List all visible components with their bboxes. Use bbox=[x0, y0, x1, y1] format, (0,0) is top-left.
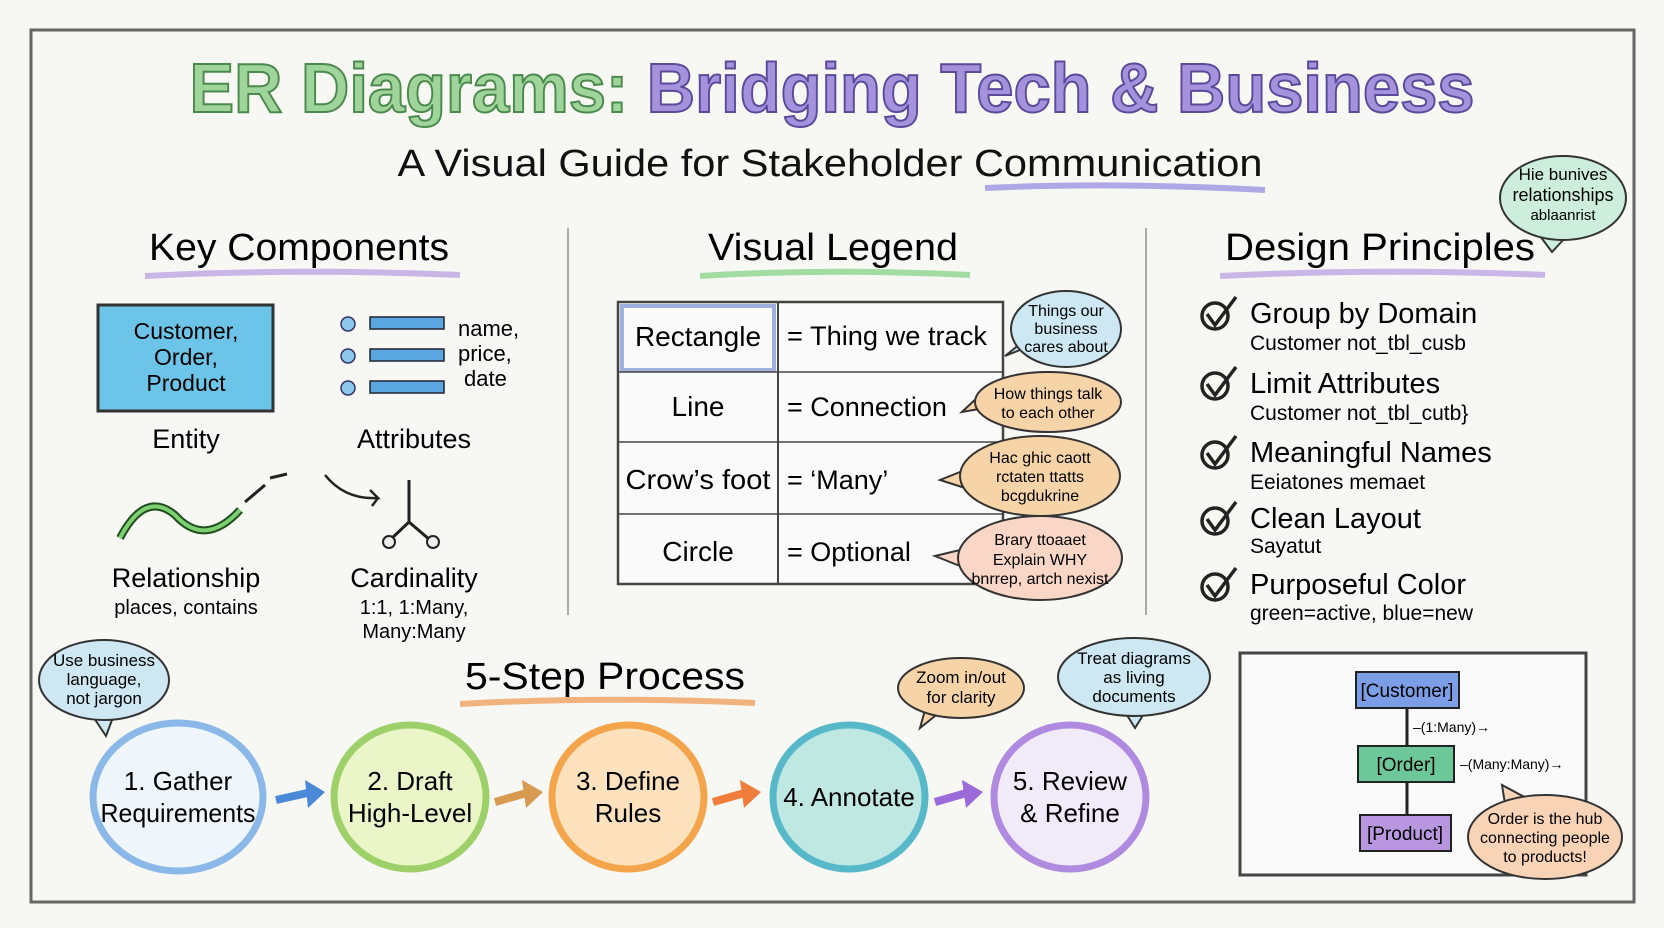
legend table: Circle bbox=[662, 536, 734, 567]
cardinality: Cardinality bbox=[350, 563, 478, 593]
attributes: price, bbox=[458, 341, 512, 366]
heading: Visual Legend: Visual Legend bbox=[708, 227, 958, 269]
mini ER diagram: –(Many:Many)→ bbox=[1460, 756, 1563, 772]
design principles list: Sayatut bbox=[1250, 535, 1321, 558]
callout: treat diagrams: as living bbox=[1103, 668, 1165, 687]
callout: crow's foot note: rctaten ttatts bbox=[996, 469, 1084, 486]
legend table: Line bbox=[672, 391, 724, 422]
callout: treat diagrams: Treat diagrams bbox=[1077, 649, 1191, 668]
cardinality bbox=[325, 475, 478, 643]
step 3 bbox=[552, 725, 704, 869]
legend table: Rectangle bbox=[635, 321, 761, 352]
heading: Key Components: Key Components bbox=[149, 227, 449, 269]
design principles list: Limit Attributes bbox=[1250, 368, 1440, 400]
callout: top right: ablaanrist bbox=[1530, 207, 1596, 224]
callout: crow's foot note: Hac ghic caott bbox=[989, 450, 1091, 467]
entity: Entity bbox=[152, 424, 220, 454]
step 2: 2. Draft bbox=[367, 766, 453, 796]
design principles list: Purposeful Color bbox=[1250, 569, 1466, 601]
step 2: High-Level bbox=[348, 798, 472, 828]
legend table: Crow’s foot bbox=[626, 464, 771, 495]
arrow 3 bbox=[713, 780, 761, 808]
entity: Product bbox=[146, 370, 226, 396]
relationship: Relationship bbox=[112, 563, 260, 593]
callout: how things talk bbox=[962, 372, 1121, 432]
callout: things our business bbox=[1005, 291, 1121, 367]
callout: top right: relationships bbox=[1512, 185, 1614, 205]
heading: 5-Step Process: 5-Step Process bbox=[465, 656, 745, 698]
step 2 bbox=[334, 725, 486, 869]
mini ER diagram: [Customer] bbox=[1361, 681, 1453, 702]
callout: things our business: business bbox=[1034, 321, 1098, 338]
step 1: 1. Gather bbox=[124, 766, 233, 796]
callout: treat diagrams bbox=[1058, 638, 1210, 728]
title: ER Diagrams: Bridging Tech & Business bbox=[190, 49, 1474, 127]
callout: order is the hub: Order is the hub bbox=[1488, 811, 1602, 828]
callout: crow's foot note bbox=[940, 436, 1120, 516]
attributes: name, bbox=[458, 316, 519, 341]
callout: order is the hub: to products! bbox=[1503, 849, 1587, 866]
step 3: Rules bbox=[595, 798, 661, 828]
callout: top right bbox=[1500, 156, 1626, 252]
callout: order is the hub bbox=[1468, 785, 1622, 879]
callout: treat diagrams: documents bbox=[1092, 687, 1176, 706]
step 5: 5. Review bbox=[1013, 766, 1127, 796]
legend table: = Optional bbox=[787, 537, 911, 567]
step 4 bbox=[773, 725, 925, 869]
callout: order is the hub: connecting people bbox=[1480, 830, 1610, 847]
legend table bbox=[618, 302, 1003, 584]
step 4: 4. Annotate bbox=[783, 782, 915, 812]
callout: zoom in/out: Zoom in/out bbox=[916, 668, 1006, 687]
callout: circle note bbox=[935, 516, 1122, 600]
relationship: places, contains bbox=[114, 597, 258, 619]
cardinality: Many:Many bbox=[362, 621, 466, 643]
callout: how things talk: How things talk bbox=[994, 386, 1103, 403]
design principles list: Group by Domain bbox=[1250, 298, 1477, 330]
entity: Customer, bbox=[134, 318, 238, 344]
callout: use business language bbox=[39, 640, 169, 736]
entity: Order, bbox=[154, 344, 218, 370]
mini ER diagram: –(1:Many)→ bbox=[1413, 719, 1490, 735]
step 1: Requirements bbox=[100, 798, 256, 828]
callout: use business language: not jargon bbox=[66, 689, 142, 708]
attributes: Attributes bbox=[357, 424, 471, 454]
mini ER diagram: [Product] bbox=[1367, 824, 1443, 845]
design principles list: green=active, blue=new bbox=[1250, 602, 1474, 625]
entity bbox=[98, 305, 273, 454]
arrow 2 bbox=[495, 780, 543, 808]
attributes bbox=[341, 316, 519, 454]
mini ER diagram: [Order] bbox=[1376, 755, 1436, 776]
callout: zoom in/out bbox=[898, 658, 1024, 728]
callout: use business language: language, bbox=[67, 670, 141, 689]
design principles list: Customer not_tbl_cutb} bbox=[1250, 402, 1468, 425]
step 5 bbox=[994, 725, 1146, 869]
callout: things our business: cares about bbox=[1024, 339, 1108, 356]
design principles list: Eeiatones memaet bbox=[1250, 471, 1425, 494]
relationship bbox=[112, 474, 287, 619]
design principles list: Meaningful Names bbox=[1250, 437, 1492, 469]
callout: top right: Hie bunives bbox=[1519, 165, 1607, 184]
arrow 4 bbox=[935, 780, 983, 808]
callout: zoom in/out: for clarity bbox=[927, 688, 996, 707]
callout: things our business: Things our bbox=[1028, 303, 1104, 320]
design principles list: Customer not_tbl_cusb bbox=[1250, 332, 1466, 355]
legend table: = Connection bbox=[787, 392, 947, 422]
callout: circle note: Brary ttoaaet bbox=[994, 532, 1086, 549]
callout: circle note: bnrrep, artch nexist bbox=[972, 571, 1109, 588]
step 3: 3. Define bbox=[576, 766, 680, 796]
callout: use business language: Use business bbox=[53, 651, 155, 670]
design principles list: Clean Layout bbox=[1250, 503, 1421, 535]
mini ER diagram bbox=[1240, 653, 1586, 875]
callout: crow's foot note: bcgdukrine bbox=[1001, 488, 1079, 505]
step 1 bbox=[93, 723, 263, 871]
cardinality: 1:1, 1:Many, bbox=[360, 597, 468, 619]
design principles list bbox=[1202, 297, 1492, 625]
callout: circle note: Explain WHY bbox=[993, 552, 1087, 569]
step 5: & Refine bbox=[1020, 798, 1120, 828]
legend table: = Thing we track bbox=[787, 321, 987, 351]
attributes: date bbox=[464, 366, 507, 391]
arrow 1 bbox=[276, 780, 325, 808]
heading: Design Principles: Design Principles bbox=[1225, 227, 1535, 269]
legend table: = ‘Many’ bbox=[787, 465, 888, 495]
callout: how things talk: to each other bbox=[1001, 405, 1095, 422]
subtitle: A Visual Guide for Stakeholder Communication bbox=[398, 143, 1262, 185]
